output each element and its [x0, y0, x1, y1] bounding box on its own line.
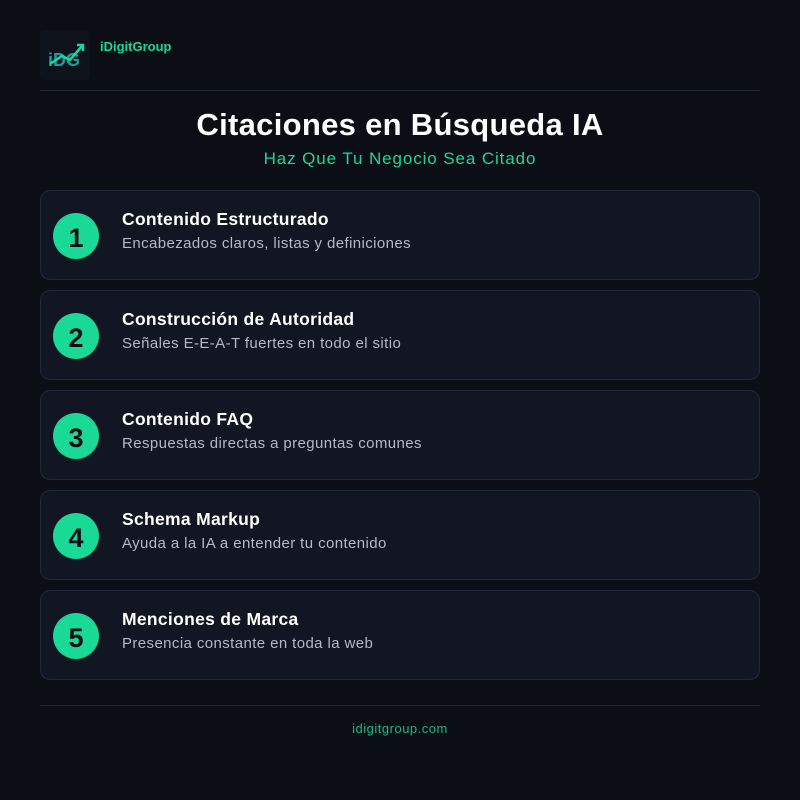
title: Citaciones en Búsqueda IA: [196, 107, 604, 142]
card 3: 3: [68, 423, 84, 453]
card 1: Encabezados claros, listas y definiciones: [122, 235, 411, 252]
card 5: [40, 590, 760, 680]
card 5: Menciones de Marca: [122, 609, 299, 629]
logo icon: [40, 30, 90, 80]
footer url: idigitgroup.com: [352, 721, 448, 736]
card 5: 5: [68, 623, 84, 653]
brand name: iDigitGroup: [100, 39, 172, 54]
card 2: [40, 290, 760, 380]
card 4: Schema Markup: [122, 509, 260, 529]
logo icon: iDG: [48, 50, 80, 70]
card 3: [40, 390, 760, 480]
card 3: Respuestas directas a preguntas comunes: [122, 435, 422, 452]
card 4: Ayuda a la IA a entender tu contenido: [122, 535, 387, 552]
card 3: Contenido FAQ: [122, 409, 253, 429]
card 1: 1: [68, 223, 84, 253]
card 5: Presencia constante en toda la web: [122, 635, 373, 652]
card 2: 2: [68, 323, 84, 353]
card 4: 4: [68, 523, 84, 553]
card 4: [40, 490, 760, 580]
card 1: [40, 190, 760, 280]
subtitle: Haz Que Tu Negocio Sea Citado: [264, 149, 536, 168]
card 2: Señales E-E-A-T fuertes en todo el sitio: [122, 335, 401, 352]
card 2: Construcción de Autoridad: [122, 309, 354, 329]
card 1: Contenido Estructurado: [122, 209, 329, 229]
